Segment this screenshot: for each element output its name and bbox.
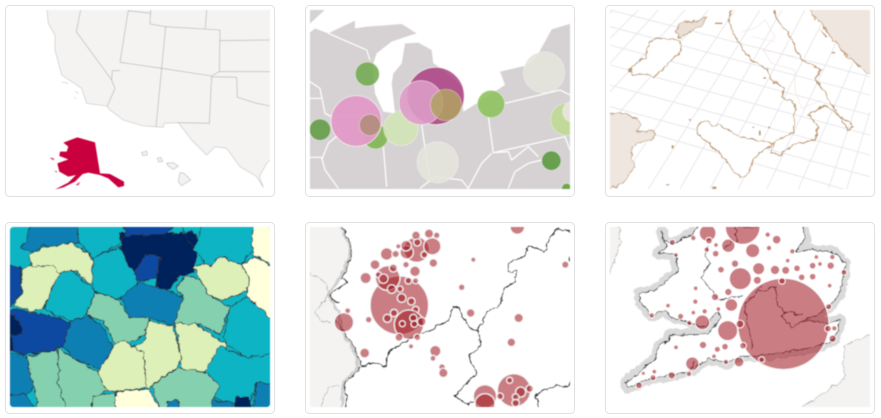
Hawaii — [142, 151, 191, 186]
Sardinia — [630, 38, 682, 77]
panel: proportional circles around the northern coast — [302, 220, 574, 414]
France — [795, 333, 878, 413]
regional borders — [742, 20, 822, 108]
Britain land and coast — [625, 220, 845, 388]
Tunisia — [602, 113, 655, 197]
panel: Great Lakes proportional circles — [306, 6, 584, 196]
Balkans — [809, 10, 870, 74]
panel: Alaska highlighted on US map — [6, 6, 274, 196]
land, halo and coast group — [610, 226, 870, 408]
Sicily — [697, 122, 772, 178]
Britain halo — [625, 220, 845, 388]
land — [310, 10, 570, 189]
coasts and land group — [302, 220, 572, 413]
Alaska — [55, 137, 124, 189]
neighbouring land with shaded coast — [310, 226, 361, 408]
choropleth regions — [7, 223, 277, 413]
southwest US land — [47, 7, 273, 187]
proportional circles — [636, 210, 847, 389]
graticule — [610, 10, 870, 197]
state borders — [310, 33, 570, 188]
inland borders — [310, 273, 338, 410]
circles — [309, 52, 584, 193]
black coast and borders — [330, 223, 572, 410]
Aleutian and small islands — [51, 157, 80, 185]
panel: Italy map with graticule — [602, 3, 878, 197]
internal borders — [690, 227, 803, 370]
lakes — [307, 7, 573, 113]
panel: choropleth map of regions — [6, 222, 277, 414]
Italy — [728, 7, 853, 155]
small islands — [628, 17, 860, 189]
Corsica — [675, 16, 707, 37]
proportional circles — [334, 220, 569, 414]
panel: proportional circles over southern Britain — [602, 210, 878, 414]
coastlines of Italy and islands — [610, 10, 870, 190]
Ireland — [610, 226, 622, 274]
